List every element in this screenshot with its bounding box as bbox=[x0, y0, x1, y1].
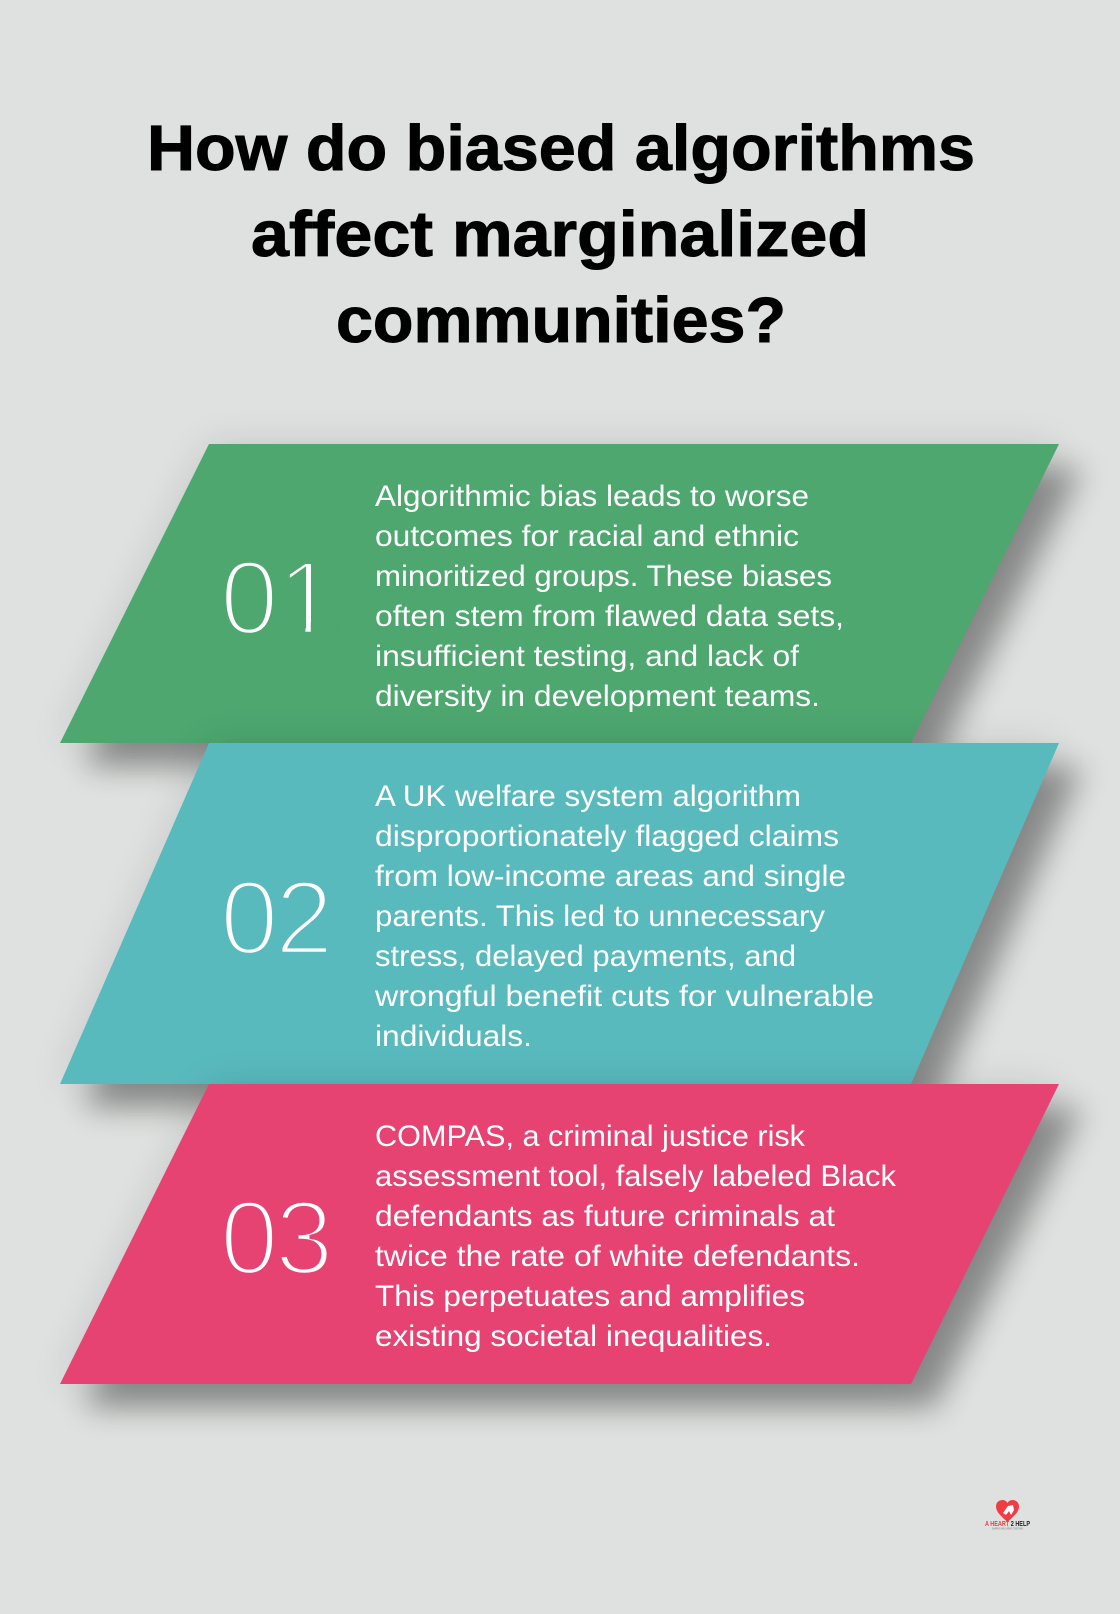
text: step 03 description: existing societal inequalities. bbox=[375, 1320, 772, 1353]
text: step 03 description: This perpetuates and amplifies bbox=[375, 1280, 805, 1313]
text: step 02 description: parents. This led to unnecessary bbox=[375, 900, 825, 933]
title: affect marginalized bbox=[251, 198, 869, 270]
logo: A Heart 2 Help: A HEART 2 HELP bbox=[985, 1521, 1030, 1528]
text: step 01 description: often stem from flawed data sets, bbox=[375, 600, 844, 633]
text: step 02 description: from low-income areas and single bbox=[375, 860, 846, 893]
text: step 02 description: A UK welfare system algorithm bbox=[375, 780, 801, 813]
title bbox=[147, 112, 975, 356]
text: step 01 description: outcomes for racial and ethnic bbox=[375, 520, 799, 553]
title: communities? bbox=[336, 284, 786, 356]
text: step 01 description: minoritized groups. These biases bbox=[375, 560, 832, 593]
text: step 02 description: wrongful benefit cuts for vulnerable bbox=[374, 980, 874, 1013]
text: step 01 description: insufficient testing, and lack of bbox=[375, 640, 800, 673]
text: step 03 description: assessment tool, falsely labeled Black bbox=[375, 1160, 896, 1193]
text: step 03 description bbox=[375, 1120, 896, 1353]
text: step 02 description bbox=[374, 780, 874, 1053]
text: step 01 description bbox=[375, 480, 844, 713]
panel: step 01 bbox=[60, 444, 1083, 767]
panel: step 03 bbox=[60, 1084, 1083, 1408]
logo: A Heart 2 Help bbox=[985, 1500, 1030, 1530]
number 03: 03 bbox=[220, 1180, 333, 1297]
text: step 03 description: defendants as future criminals at bbox=[375, 1200, 835, 1233]
title: How do biased algorithms bbox=[147, 112, 975, 184]
text: step 03 description: twice the rate of white defendants. bbox=[375, 1240, 860, 1273]
text: step 02 description: disproportionately flagged claims bbox=[375, 820, 839, 853]
text: step 01 description: Algorithmic bias leads to worse bbox=[375, 480, 809, 513]
text: step 01 description: diversity in development teams. bbox=[375, 680, 820, 713]
number 01: 01 bbox=[220, 540, 336, 657]
text: step 02 description: stress, delayed payments, and bbox=[375, 940, 796, 973]
icon: heart with hands bbox=[996, 1500, 1019, 1522]
number 02: 02 bbox=[220, 860, 333, 977]
text: step 02 description: individuals. bbox=[375, 1020, 532, 1053]
text: step 03 description: COMPAS, a criminal justice risk bbox=[375, 1120, 805, 1153]
panel: step 02 bbox=[60, 743, 1083, 1108]
logo: A Heart 2 Help: SHARING AND CARING TOGETHER bbox=[992, 1526, 1023, 1530]
